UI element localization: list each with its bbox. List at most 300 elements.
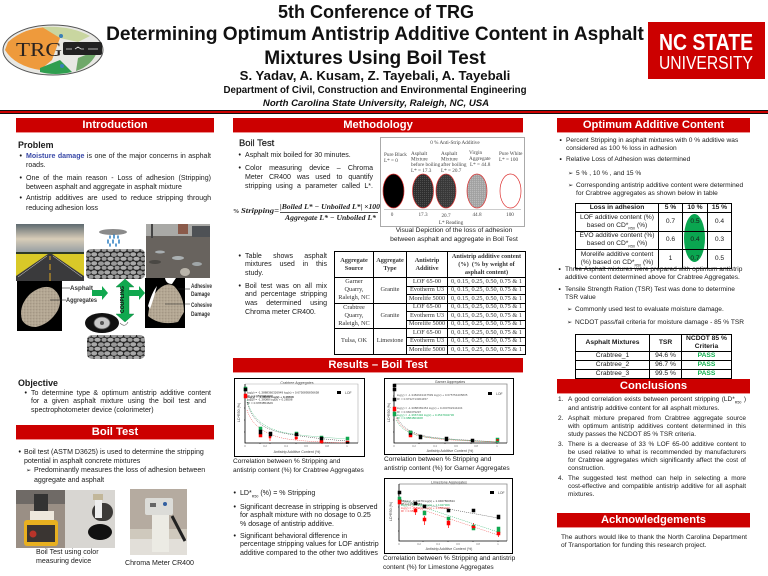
chart: Crabtree aggregates: 0 [244, 444, 246, 448]
figure: L* readings of samples: Mixture [411, 156, 428, 162]
chart: Limestone aggregates [384, 478, 513, 554]
logo: NC State University: UNIVERSITY [659, 53, 753, 73]
arrow: to damage [129, 286, 145, 300]
table: loss in adhesion: Loss in adhesion [590, 204, 644, 211]
label: adhesive damage: Damage [191, 292, 211, 298]
chart: Garner aggregates: 0.4 [433, 444, 437, 448]
conclusion 3: be used relative to what is recommended by manufacturers [568, 449, 746, 456]
caption: Garner correlation: antistrip content (%) for Garner Aggregates [384, 464, 510, 472]
bullet: loss of adhesion: One of the main reason - Loss of adhesion (Stripping) [26, 174, 211, 182]
chart: Garner aggregates: LOF [496, 392, 503, 396]
table: loss in adhesion: 0.5 [715, 254, 724, 262]
table: asphalt mixtures used: 0, 0.15, 0.25, 0.50, 0.75 & 1 [451, 312, 522, 318]
panel: optimum additive content: ➢ [568, 182, 573, 189]
table: loss in adhesion: 0.4 [690, 236, 700, 243]
formula: percent stripping: |Boiled L* − Unboiled L*| ×100 [280, 204, 381, 211]
objective text: spectrophotometer device (colorimeter) [31, 407, 154, 414]
bullet: boil test standard [18, 448, 204, 464]
heading: Conclusions: Conclusions [620, 380, 687, 392]
objective text: for a given asphalt mixture using the boil test and [31, 398, 206, 405]
bullet: TSR test: TSR value [565, 294, 596, 301]
caption: boil test: measuring device [36, 558, 91, 564]
panel: conclusions: 4. [558, 475, 563, 482]
objective text [24, 390, 211, 414]
panel: boil test: ➢ [26, 467, 31, 474]
bullet: relative loss: Relative Loss of Adhesion was determined [566, 156, 690, 163]
conclusion 3: There is a decrease of 33 % LOF 65-00 additive content to [568, 441, 746, 448]
chart: Crabtree aggregates: 0.8 [325, 444, 329, 448]
table: asphalt mixtures used: Quarry, [344, 286, 364, 293]
table: asphalt mixtures used: 0, 0.15, 0.25, 0.50, 0.75 & 1 [451, 320, 522, 327]
bullet: three mixtures: additive content determined above for Crabtree Aggregates. [565, 274, 740, 281]
image: aggregate with asphalt [17, 281, 62, 331]
bullet: boiled duration: Asphalt mix boiled for 30 minutes. [245, 152, 351, 158]
heading: Objective: Objective [18, 378, 58, 388]
heading: Problem: Problem [18, 140, 54, 150]
chart: Garner aggregates: R² = 0.966379297 [397, 410, 421, 414]
sub-bullet: adhesion loss: Predominantly measures the loss of adhesion between [34, 467, 205, 474]
diagram: moisture damage mechanism [16, 224, 213, 359]
formula: percent stripping: % [233, 208, 239, 215]
panel: methodology: • [238, 253, 241, 260]
bullet: boil test standard: potential in asphalt concrete mixtures [24, 458, 140, 464]
panel: introduction: • [24, 390, 27, 397]
conference name: 5th Conference of TRG [278, 2, 474, 22]
figure: L* readings of samples: Pure White [499, 151, 523, 157]
photo: color measuring device and sample [65, 490, 115, 548]
chart: Crabtree aggregates: Antistrip Additive Content (%) [274, 450, 320, 454]
panel: conclusions: 3. [558, 441, 563, 448]
bullet: color measuring device: Color measuring device – Chroma [245, 164, 373, 172]
chart: Limestone aggregates: log(y) = -0.79312 log(x) + 1.0583347 [401, 506, 450, 510]
chart: Garner aggregates: 1 [496, 444, 498, 448]
chart: Limestone aggregates: log(y) = -0.43479 log(x) + 1.0467803634 [401, 499, 455, 503]
conclusion 1 [568, 394, 746, 412]
table: asphalt mixtures used: 0, 0.15, 0.25, 0.50, 0.75 & 1 [451, 346, 522, 352]
bullet: decrease in stripping: for asphalt mixture with no dosage to 0.25 [240, 512, 371, 519]
figure: L* readings of samples: L* = 17.3 [411, 168, 432, 174]
table: asphalt mixtures used: LOF 65-00 [413, 278, 441, 284]
panel: results [233, 358, 523, 570]
chart: Garner aggregates: 0.8 [474, 444, 478, 448]
bullet: loss of adhesion [20, 174, 211, 190]
table: asphalt mixtures used: LOF 65-00 [413, 328, 441, 336]
photo: hot plate [16, 490, 66, 548]
table: asphalt mixtures used: Morelife 5000 [409, 294, 445, 302]
sub-bullet: corresponding content: Corresponding antistrip additive content were determined [576, 182, 743, 189]
panel: optimum additive content: • [558, 266, 561, 273]
figure: L* readings of samples: Mixture [441, 156, 458, 162]
chart: Garner aggregates: 0.6 [454, 444, 458, 448]
label: asphalt: Asphalt [70, 286, 93, 292]
figure: L* readings of samples: before boiling [411, 161, 441, 168]
table: loss in adhesion: based on CD*R50 (%) [587, 240, 647, 248]
figure: L* readings of samples: 100 [506, 212, 514, 218]
chart: Garner aggregates: log(y) = -1.3484643447599 log(x) + 0.675754405835 [397, 393, 468, 397]
bullet: boil test on all mix: Chroma meter CR400. [245, 309, 316, 316]
conclusion 4: The suggested test method can help in selecting a more [568, 475, 746, 482]
university location: North Carolina State University, Raleigh, NC, USA [263, 98, 489, 108]
table: asphalt mixtures used: asphalt content) [465, 268, 508, 276]
heading: Results – Boil Test [233, 358, 523, 373]
icon: tire on pavement [85, 313, 145, 359]
bullet: behavioral difference: additive compared to the other two additives [240, 550, 378, 557]
panel: boil test: • [18, 448, 21, 456]
caption: L* figure: between asphalt and aggregate in Boil Test [390, 236, 518, 242]
bullet: table description: Table shows asphalt [245, 253, 327, 260]
bullet: antistrip additives: Antistrip additives are used to reduce stripping through [26, 195, 211, 202]
panel: methodology: • [238, 164, 241, 172]
table: loss in adhesion: 0.4 [715, 218, 724, 225]
table: asphalt mixtures used: Aggregate [340, 256, 368, 264]
panel: optimum additive content: ➢ [568, 170, 573, 177]
panel: optimum additive content: ➢ [567, 318, 572, 326]
header [0, 2, 768, 114]
chart: Limestone aggregates: 0.2 [417, 542, 421, 546]
heading: Conclusions [557, 379, 750, 394]
figure: L* readings of samples: Virgin [469, 150, 483, 156]
caption: Limestone correlation [383, 554, 515, 570]
chart: Limestone aggregates: Antistrip Additive Content (%) [426, 547, 472, 551]
image: adhesive and cohesive damage [145, 278, 185, 328]
figure: L* readings of samples: Pure Black [384, 152, 407, 158]
label: adhesive damage [178, 284, 213, 298]
panel: results: • [234, 504, 236, 510]
table: asphalt mixtures used: Morelife 5000 [409, 346, 445, 352]
label: cohesive damage: Damage [191, 312, 211, 318]
figure: L* readings of samples: 17.3 [418, 212, 428, 218]
table: asphalt mixtures used: 0, 0.15, 0.25, 0.50, 0.75 & 1 [451, 303, 522, 310]
table: asphalt mixtures used: 0, 0.15, 0.25, 0.50, 0.75 & 1 [451, 294, 522, 302]
formula: percent stripping [233, 204, 381, 222]
bullet: table description [238, 252, 327, 277]
table: asphalt mixtures used: Raleigh, NC [338, 294, 370, 301]
panel: conclusions: 2. [558, 415, 563, 422]
heading: Methodology [233, 118, 523, 133]
bullet: boil test on all mix [238, 282, 327, 316]
label: aggregates [50, 298, 98, 304]
chart: Garner aggregates: Garner Aggregates [435, 380, 465, 384]
chart: Garner aggregates: LD*R50 (%) [387, 403, 391, 422]
label: cohesive damage [165, 303, 213, 318]
chart: Crabtree aggregates: Crabtree Aggregates [280, 381, 314, 385]
chart: Crabtree aggregates: log(y) = -1.3888360326949 log(x) + 0.6750895836658 [247, 390, 319, 394]
table: TSR results: TSR [659, 339, 672, 346]
table: TSR results: NCDOT 85 % [686, 335, 727, 342]
conclusion 2: with optimum antistrip additives content determined in this [568, 423, 746, 430]
conclusion 3 [568, 441, 746, 473]
sub-bullet: adhesion loss [26, 466, 205, 484]
title [106, 24, 644, 69]
logo: TRG [2, 24, 104, 76]
panel: optimum additive content [557, 118, 750, 379]
heading: Boil Test [16, 425, 214, 440]
highlight: 10 % column [684, 214, 705, 262]
chart: Crabtree aggregates [234, 378, 365, 457]
sub-bullet: percent levels: 5 % , 10 % , and 15 % [576, 170, 641, 177]
bullet: decrease in stripping [234, 504, 378, 528]
chart: Garner aggregates: R² = 0.9732713364457 [397, 397, 428, 401]
photo: chroma meter [130, 489, 187, 555]
chart: Crabtree aggregates: log(y) = -1.38560 log(x) + 0.46508 [247, 395, 294, 399]
table: TSR results: Criteria [695, 343, 718, 350]
panel: optimum additive content: ➢ [567, 306, 572, 312]
chart: Crabtree aggregates: R² = 0.9783854629 [247, 401, 273, 405]
chart: Crabtree aggregates: LOF [345, 391, 352, 395]
table: asphalt mixtures used: Granite [381, 286, 399, 293]
chart: Garner aggregates: log(y) = -1.3088369454 log(x) + 0.200792344434 [397, 406, 463, 410]
chart: Garner aggregates [384, 378, 514, 455]
chart: Limestone aggregates: 0.4 [436, 542, 440, 546]
acknowledgement text: The authors would like to thank the North Carolina Department [561, 534, 747, 541]
conclusion 3: construction. [568, 465, 605, 472]
table: TSR results: Asphalt Mixtures [586, 339, 639, 346]
figure: L* readings of samples: 0 % Anti-Strip Additive [430, 140, 480, 146]
bullet: boil test on all mix: and percentage stripping [245, 291, 327, 298]
conclusion 1: and antistrip additive content for all asphalt mixtures. [568, 404, 719, 412]
formula: percent stripping: Stripping= [241, 206, 280, 215]
panel: methodology: • [238, 283, 241, 290]
table: asphalt mixtures used: Garner [345, 278, 363, 285]
heading: Acknowledgements: Acknowledgements [601, 514, 706, 526]
logo: NC State University [648, 22, 765, 79]
panel: methodology [233, 118, 526, 355]
label: aggregates: Aggregates [66, 298, 98, 304]
bullet: three mixtures: Three Asphalt mixtures were prepared with optimum antistrip [565, 266, 742, 273]
table: TSR results: PASS [698, 370, 715, 377]
panel: results: • [234, 490, 236, 496]
table: loss in adhesion: 10 % [687, 204, 703, 211]
caption: Crabtree correlation: Correlation between % Stripping and [233, 458, 340, 464]
bullet: behavioral difference [234, 532, 379, 557]
logo: TRG: TRG [16, 39, 62, 61]
figure: L* readings of samples: Asphalt [411, 151, 428, 157]
caption: L* figure [390, 226, 518, 242]
table: TSR results: Crabtree_3 [596, 370, 629, 377]
chart: Crabtree aggregates: 1 [346, 444, 348, 448]
table: asphalt mixtures used: Aggregate [376, 256, 404, 264]
chart: Limestone aggregates: LOF [498, 491, 505, 495]
panel: introduction: • [20, 195, 22, 202]
bullet: percent stripping: Percent Stripping in asphalt mixtures with 0 % additive was [566, 137, 738, 144]
bullet: color measuring device: stripping using a parameter called L*. [245, 182, 373, 190]
title: Mixtures Using Boil Test [264, 48, 486, 69]
table: asphalt mixtures used [334, 251, 526, 355]
bullet: behavioral difference: Significant behavioral difference in [240, 532, 347, 540]
table: loss in adhesion: based on CD*R50 (%) [587, 222, 647, 230]
table: asphalt mixtures used: Crabtree [343, 304, 365, 311]
panel: introduction: • [20, 174, 22, 182]
bullet: moisture damage: Moisture damage is one of the major concerns in asphalt [26, 152, 211, 160]
figure: L* readings of samples: L* = 100 [499, 157, 518, 163]
table: asphalt mixtures used: LOF 65-00 [413, 303, 441, 310]
chart: Limestone aggregates: 0 [398, 542, 400, 546]
figure: L* readings of samples: L* = 44.8 [470, 162, 491, 168]
table: asphalt mixtures used: Antistrip additive content [452, 252, 521, 260]
bullet: behavioral difference: percentage stripping values for LOF antistrip [240, 541, 379, 548]
arrow: to coupling [92, 286, 108, 300]
panel: acknowledgements [557, 513, 750, 553]
bullet: percent stripping: considered as 100 % loss in adhesion [566, 145, 677, 152]
bullet: color measuring device: Meter CR400 was used to quantify [245, 174, 373, 180]
chart: Limestone aggregates: R² = 0.9345804 [401, 502, 422, 506]
bullet: TSR test: Tensile Strength Ration (TSR) Test was done to determine [565, 286, 735, 293]
table: asphalt mixtures used: 0, 0.15, 0.25, 0.50, 0.75 & 1 [451, 328, 522, 336]
caption: Garner correlation [384, 456, 510, 472]
conclusion 4: cost-effective and compatible antistrip additive for all asphalt [568, 483, 746, 490]
heading: Boil Test: Boil Test [239, 137, 274, 148]
table: asphalt mixtures used: Evotherm U3 [410, 337, 444, 344]
heading: Methodology: Methodology [343, 119, 413, 131]
bullet: moisture damage: roads. [26, 162, 46, 169]
heading: Optimum Additive Content: Optimum Additive Content [583, 119, 724, 131]
table: asphalt mixtures used: 0, 0.15, 0.25, 0.50, 0.75 & 1 [451, 286, 522, 293]
chart: Limestone aggregates: R² = 0.9847 [401, 509, 417, 513]
panel: methodology: • [238, 152, 241, 158]
table: TSR results [575, 334, 732, 379]
table: asphalt mixtures used: 0, 0.15, 0.25, 0.50, 0.75 & 1 [451, 337, 522, 344]
bullet: moisture damage [20, 152, 211, 169]
bullet: TSR test [565, 286, 735, 302]
chart: Garner aggregates: Antistrip Additive Content (%) [427, 449, 473, 453]
table: asphalt mixtures used: Additive [415, 264, 439, 272]
table: TSR results: 94.6 % [655, 352, 676, 359]
chart: Garner aggregates: 0 [393, 444, 395, 448]
table: asphalt mixtures used: Type [383, 264, 397, 272]
chart: Crabtree aggregates: log(y) = -1.38088 log(x) + 0.28508 [247, 398, 293, 402]
sub-bullet: adhesion loss: aggregate and asphalt [34, 477, 104, 484]
table: asphalt mixtures used: Limestone [377, 337, 403, 344]
bullet: color measuring device [238, 164, 374, 190]
photo: potholes [146, 224, 210, 278]
caption: boil test [36, 548, 99, 564]
heading: Introduction: Introduction [82, 119, 148, 131]
caption: Crabtree correlation [233, 458, 364, 474]
objective text: To determine type & optimum antistrip additive content [31, 390, 211, 397]
figure: L* readings of samples: 44.8 [472, 212, 482, 218]
figure: L* readings of samples: L* = 20.7 [441, 168, 462, 174]
conclusion 4: mixtures. [568, 491, 594, 498]
table: TSR results: Crabtree_2 [596, 361, 629, 368]
table: loss in adhesion: 1 [669, 254, 672, 262]
heading: Optimum Additive Content [557, 118, 750, 133]
chart: Limestone aggregates: 1 [497, 542, 499, 546]
table: loss in adhesion: EVO additive content (%) [579, 232, 655, 239]
conclusion 3: for Crabtree aggregates which significantly affect the cost of [568, 457, 746, 464]
title: Determining Optimum Antistrip Additive Content in Asphalt [106, 24, 644, 45]
panel: optimum additive content: • [558, 286, 561, 293]
bullet: LD definition: LD*R50 (%) = % Stripping [240, 490, 315, 498]
panel: results: • [234, 532, 236, 540]
heading: Introduction [16, 118, 214, 133]
conclusion 4 [568, 475, 746, 499]
panel: conclusions [557, 379, 750, 501]
table: TSR results: PASS [698, 352, 715, 359]
heading: Acknowledgements [557, 513, 750, 528]
table: TSR results: PASS [698, 361, 715, 368]
table: TSR results: 99.5 % [655, 370, 676, 377]
figure: L* readings of samples [380, 137, 525, 227]
bullet: boil test standard: Boil test (ASTM D3625) is used to determine the stripping [24, 448, 204, 456]
sub-bullet: NCDOT criteria: NCDOT pass/fail criteria for moisture damage - 85 % TSR [575, 318, 744, 326]
sub-bullet: corresponding content [568, 182, 743, 197]
table: asphalt mixtures used: Source [345, 264, 363, 272]
acknowledgement text [561, 534, 747, 550]
conclusion 2: Asphalt mixture prepared from Crabtree aggregate source [568, 415, 746, 422]
table: asphalt mixtures used: Antistrip [415, 256, 439, 264]
chart: Limestone aggregates: Limestone Aggregates [431, 480, 467, 484]
table: loss in adhesion: (%) based on CD*R50 (%) [581, 258, 653, 267]
table: loss in adhesion: 0.7 [666, 218, 675, 225]
chart: Garner aggregates: log(y) = -1.3667494 log(x) + 0.4547904736 [397, 413, 454, 417]
chart: Limestone aggregates: log(y) = -0.76542 log(x) + 1.1047309 [401, 503, 450, 507]
chart: Limestone aggregates: LD*R50 (%) [389, 502, 393, 521]
chart: Crabtree aggregates: 0.6 [304, 444, 308, 448]
chart: Limestone aggregates: 0.8 [476, 542, 480, 546]
photo: road [16, 224, 84, 281]
caption: chroma meter: Chroma Meter CR400 [125, 560, 194, 567]
panel: introduction [16, 118, 214, 414]
figure: L* readings of samples: 20.7 [441, 213, 451, 219]
chart: Crabtree aggregates: 0.4 [284, 444, 288, 448]
figure: L* readings of samples: 0 [391, 212, 394, 218]
table: loss in adhesion: Morelife additive content [581, 250, 653, 258]
sub-bullet: commonly used: Commonly used test to evaluate moisture damage. [575, 306, 724, 312]
bullet: percent stripping [560, 137, 738, 152]
photos: boil test equipment [16, 489, 187, 555]
bullet: decrease in stripping: % dosage of antistrip additive. [240, 521, 334, 528]
caption: Garner correlation: Correlation between % Stripping and [384, 456, 491, 462]
table: loss in adhesion: 0.6 [666, 236, 675, 243]
chart: Garner aggregates: R² = 0.9884803468 [397, 416, 423, 420]
bullet: table description: mixtures used in this [245, 261, 327, 268]
table: loss in adhesion: 0.5 [690, 218, 700, 225]
figure: L* readings of samples: after boiling [441, 161, 467, 168]
table: asphalt mixtures used: (%) (% by weight of [458, 260, 515, 268]
table: loss in adhesion [575, 203, 732, 268]
bullet: boil test on all mix: Boil test was on all mix [245, 283, 327, 290]
table: asphalt mixtures used: Morelife 5000 [409, 320, 445, 327]
figure: L* readings of samples: L* = 0 [384, 158, 398, 164]
sub-bullet: corresponding content: for Crabtree aggregates as shown below in table [576, 190, 718, 197]
caption: Limestone correlation: Correlation between % Stripping and antistrip [383, 554, 515, 562]
figure: L* readings of samples: L* Reading [439, 220, 464, 226]
acknowledgement text: of Transportation for funding this research project. [561, 542, 707, 549]
chart: Garner aggregates: 0.2 [412, 444, 416, 448]
table: asphalt mixtures used: Tulsa, OK [341, 337, 367, 344]
caption: Crabtree correlation: antistrip content (%) for Crabtree Aggregates [233, 466, 364, 474]
table: loss in adhesion: 0.3 [715, 236, 724, 243]
table: asphalt mixtures used: Evotherm U3 [410, 312, 444, 318]
conclusion 1: A good correlation exists between percent stripping (LD*R50 ) [568, 396, 746, 404]
table: TSR results: 96.7 % [655, 361, 676, 368]
arrow: coupling [116, 279, 134, 322]
caption: boil test: Boil Test using color [36, 548, 99, 556]
affiliation: Department of Civil, Construction and Environmental Engineering [223, 84, 527, 96]
table: asphalt mixtures used: Granite [381, 312, 399, 318]
bullet: boil test on all mix: was determined using [245, 300, 327, 307]
table: loss in adhesion: 15 % [712, 204, 727, 211]
heading: Results – Boil Test: Results – Boil Test [328, 359, 428, 371]
bullet: three mixtures [565, 266, 742, 282]
caption: L* figure: Visual Depiction of the loss of adhesion [396, 226, 512, 234]
bullet: antistrip additives [20, 194, 211, 212]
heading: Boil Test: Boil Test [92, 426, 138, 438]
chart: Crabtree aggregates: R² = 0.9568383938 [247, 394, 273, 398]
chart: Crabtree aggregates: 0.2 [263, 444, 267, 448]
panel: conclusions: 1. [558, 396, 563, 402]
arrow: coupling: COUPLING [120, 286, 126, 313]
